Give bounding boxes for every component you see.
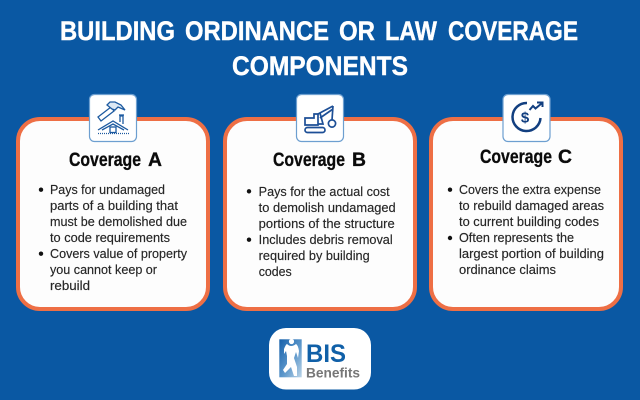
logo: BIS Benefits: Benefits xyxy=(306,365,360,380)
title: LAW xyxy=(385,16,437,46)
text block: coverage B bullets: to demolish undamaged xyxy=(259,201,396,215)
heading: coverage B: Coverage xyxy=(273,150,345,171)
heading: coverage B: B xyxy=(352,150,366,171)
icon: dollar growth cycle: $ xyxy=(521,110,530,126)
text block: coverage C bullets: to rebuild damaged areas xyxy=(459,199,604,213)
title: COMPONENTS xyxy=(232,51,408,81)
text block: coverage A bullets: Covers value of property xyxy=(50,247,188,261)
heading: coverage C: C xyxy=(558,147,572,168)
panel: coverage C xyxy=(431,119,621,309)
panel: coverage A xyxy=(18,119,208,309)
text block: coverage A bullets: must be demolished due xyxy=(50,215,187,229)
text block: coverage C bullets: Covers the extra expense xyxy=(459,183,601,197)
text block: coverage B bullets: codes xyxy=(259,265,292,279)
text block: coverage C bullets: to current building codes xyxy=(459,215,599,229)
title: COVERAGE xyxy=(448,16,578,46)
text block: coverage A bullets: rebuild xyxy=(50,279,90,293)
icon: dollar growth cycle xyxy=(503,94,550,142)
text block: coverage A bullets: you cannot keep or xyxy=(50,263,157,277)
title xyxy=(60,16,578,81)
text block: coverage B bullets: portions of the structure xyxy=(259,217,395,231)
text block: coverage A bullets xyxy=(39,183,188,293)
text block: coverage B bullets: Pays for the actual cost xyxy=(259,185,390,199)
text block: coverage A bullets: Pays for undamaged xyxy=(50,183,165,197)
text block: coverage C bullets: ordinance claims xyxy=(459,263,556,277)
text block: coverage C bullets: Often represents the xyxy=(459,231,574,245)
panel: coverage B xyxy=(225,119,415,309)
text block: coverage A bullets: parts of a building that xyxy=(50,199,179,213)
text block: coverage B bullets xyxy=(247,185,396,279)
icon: excavator with wrecking ball xyxy=(296,94,344,142)
title: ORDINANCE xyxy=(185,16,329,46)
title: OR xyxy=(339,16,375,46)
text block: coverage C bullets xyxy=(448,183,604,277)
title: BUILDING xyxy=(60,16,175,46)
text block: coverage B bullets: required by building xyxy=(259,249,370,263)
icon: logo figure xyxy=(279,339,302,377)
logo: BIS Benefits: BIS xyxy=(306,340,346,368)
text block: coverage C bullets: largest portion of building xyxy=(459,247,604,261)
heading: coverage A: A xyxy=(148,150,162,171)
icon: hammer and house xyxy=(90,94,136,142)
text block: coverage A bullets: to code requirements xyxy=(50,231,170,245)
logo: BIS Benefits xyxy=(269,328,371,390)
text block: coverage B bullets: Includes debris removal xyxy=(259,233,393,247)
heading: coverage A: Coverage xyxy=(69,150,141,171)
heading: coverage C: Coverage xyxy=(480,147,552,168)
